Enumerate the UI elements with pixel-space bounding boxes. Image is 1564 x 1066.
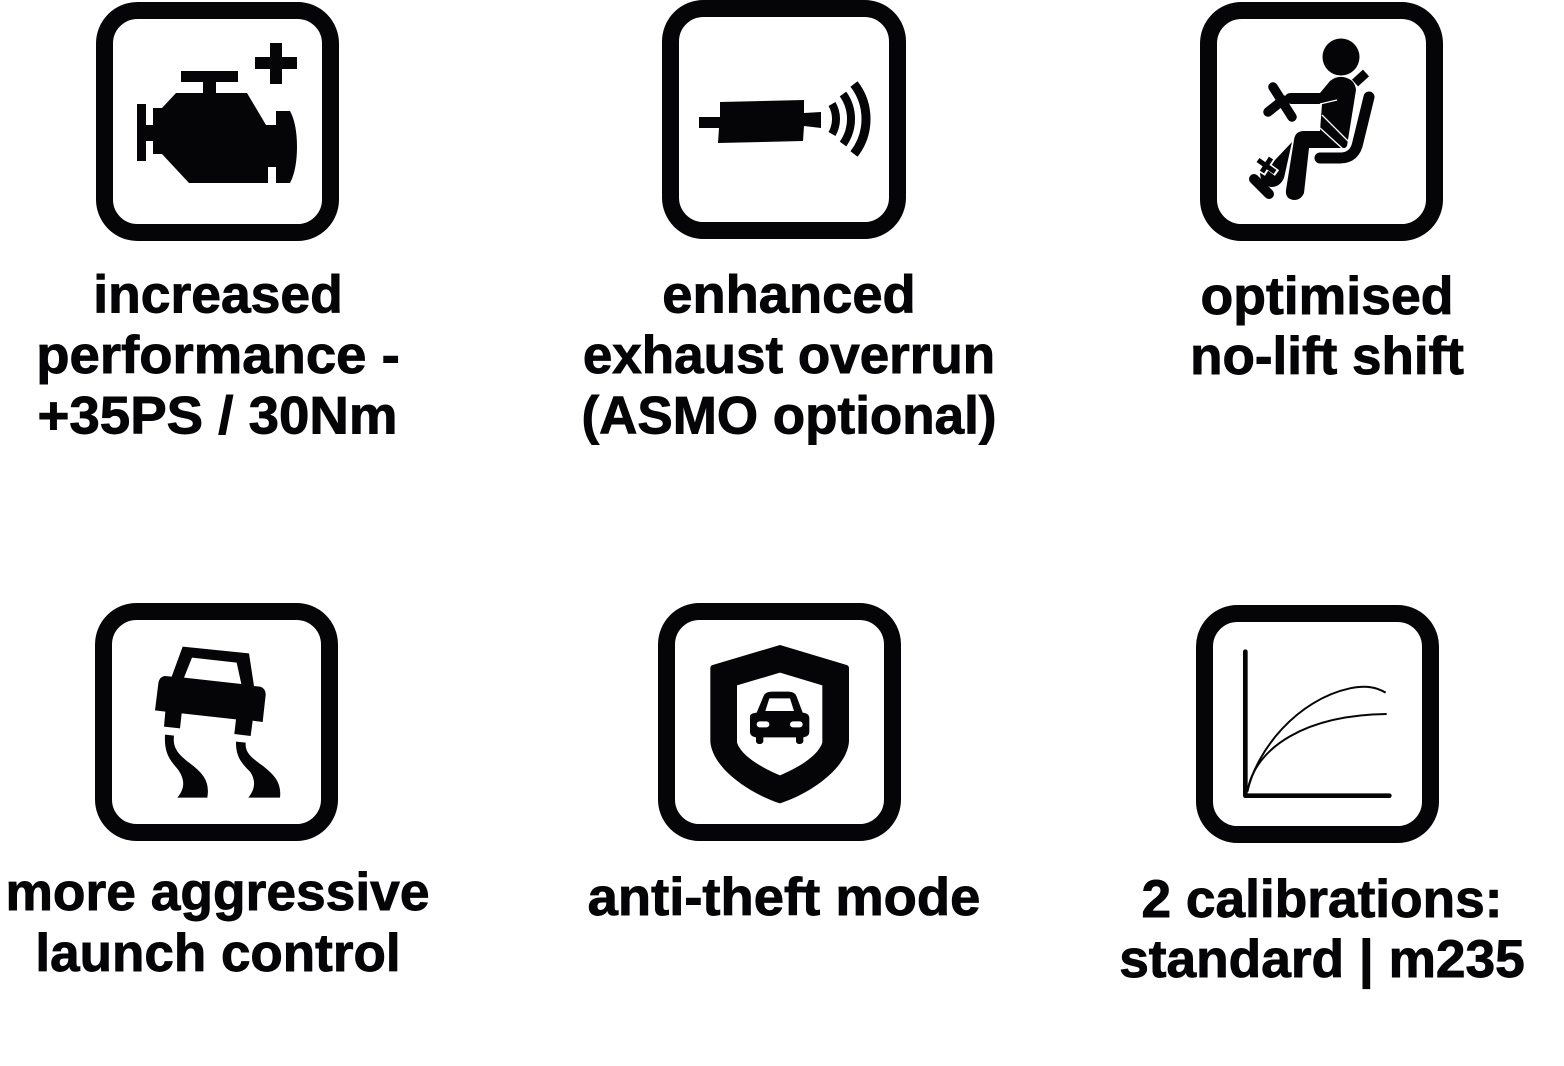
icon frame — [104, 10, 330, 232]
icon: shield with car — [710, 645, 849, 803]
label: anti-theft mode — [588, 868, 980, 927]
panel: 2 calibrations — [1119, 614, 1525, 990]
label: performance - — [36, 326, 400, 385]
icon frame — [670, 8, 898, 230]
label: no-lift shift — [1190, 327, 1464, 386]
label: standard | m235 — [1119, 930, 1525, 990]
icon: engine with plus — [137, 43, 297, 183]
label: enhanced — [662, 266, 916, 324]
label: exhaust overrun — [583, 326, 995, 385]
label: 2 calibrations: — [1142, 870, 1502, 929]
label: optimised — [1200, 267, 1454, 326]
label — [6, 863, 430, 983]
icon frame — [104, 612, 330, 832]
label: (ASMO optional) — [581, 386, 997, 446]
icon frame — [1204, 614, 1430, 834]
label: launch control — [35, 924, 401, 983]
label — [1190, 267, 1464, 386]
label — [581, 266, 997, 446]
panel: optimised no-lift shift — [1190, 10, 1464, 386]
panel: enhanced exhaust overrun — [581, 8, 997, 446]
icon: skidding car — [155, 647, 280, 798]
label — [1119, 870, 1525, 990]
label — [36, 266, 400, 446]
label: more aggressive — [6, 863, 430, 922]
icon frame — [666, 612, 892, 832]
panel: increased performance — [36, 10, 400, 446]
icon frame — [1208, 10, 1434, 232]
icon: seated driver with seat belt — [1254, 38, 1369, 200]
icon: power curve chart — [1245, 652, 1389, 796]
icon: exhaust muffler with sound waves — [699, 84, 866, 154]
label: +35PS / 30Nm — [38, 386, 398, 446]
panel: anti-theft mode — [588, 612, 980, 927]
label: increased — [93, 266, 343, 324]
panel: more aggressive launch control — [6, 612, 430, 983]
